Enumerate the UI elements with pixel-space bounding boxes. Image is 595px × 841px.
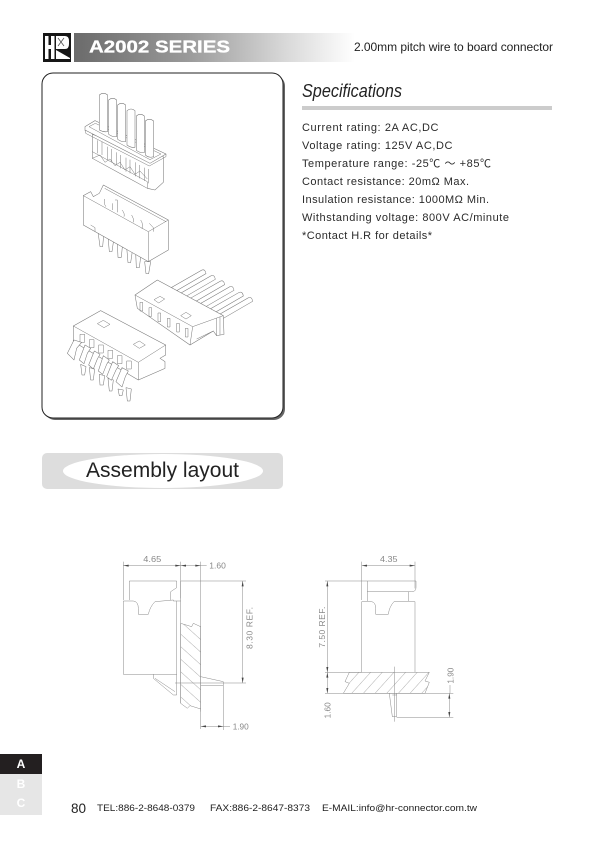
heading rule xyxy=(302,106,552,110)
diagram: front assembly layout: 1.90 xyxy=(445,667,455,684)
diagram: side assembly layout: 1.90 xyxy=(233,721,249,731)
heading: specifications: Specifications xyxy=(302,80,402,101)
diagram: side assembly layout: 8.30 REF. xyxy=(245,607,255,649)
text block: specifications list: Current rating: 2A AC,DC xyxy=(302,122,439,134)
heading: assembly layout: Assembly layout xyxy=(86,459,239,482)
footer contact: FAX:886-2-8647-8373 xyxy=(210,803,310,814)
connector: housing with wires xyxy=(85,93,166,190)
connector: right-angle header xyxy=(67,311,166,401)
page number: 80 xyxy=(71,801,86,816)
footer contact xyxy=(97,803,477,814)
diagram: side assembly layout: 4.65 xyxy=(143,554,162,564)
diagram: front assembly layout: 1.60 xyxy=(323,702,333,718)
text block: specifications list: Voltage rating: 125V AC,DC xyxy=(302,140,453,152)
side tabs: section index: A xyxy=(17,757,26,771)
connector: pin header xyxy=(83,185,168,274)
text block: specifications list: Insulation resistance: 1000MΩ Min. xyxy=(302,194,489,206)
text block: specifications list: Temperature range: -25℃ ～ +85℃ xyxy=(302,158,491,170)
header banner xyxy=(74,33,355,62)
subtitle: 2.00mm pitch wire to board connector xyxy=(354,40,553,54)
text block: specifications list: Contact resistance: 20mΩ Max. xyxy=(302,176,469,188)
text block: specifications list: *Contact H.R for details* xyxy=(302,230,433,242)
diagram: side assembly layout: 1.60 xyxy=(209,561,226,571)
diagram: side assembly layout xyxy=(123,554,255,731)
heading: assembly layout xyxy=(42,453,283,489)
diagram: front assembly layout: 4.35 xyxy=(380,554,398,564)
logo xyxy=(43,33,71,62)
footer contact: TEL:886-2-8648-0379 xyxy=(97,803,195,814)
side tabs: section index: C xyxy=(17,796,26,810)
connector: wire housing, side xyxy=(135,270,253,345)
footer contact: E-MAIL:info@hr-connector.com.tw xyxy=(322,803,477,814)
side tabs: section index xyxy=(0,754,42,815)
side tabs: section index: B xyxy=(17,777,26,791)
panel: product image xyxy=(42,73,285,420)
diagram: front assembly layout xyxy=(317,554,455,722)
diagram: front assembly layout: 7.50 REF. xyxy=(317,607,327,648)
text block: specifications list xyxy=(302,122,509,242)
series title: A2002 SERIES xyxy=(89,36,230,56)
text block: specifications list: Withstanding voltage: 800V AC/minute xyxy=(302,212,509,224)
